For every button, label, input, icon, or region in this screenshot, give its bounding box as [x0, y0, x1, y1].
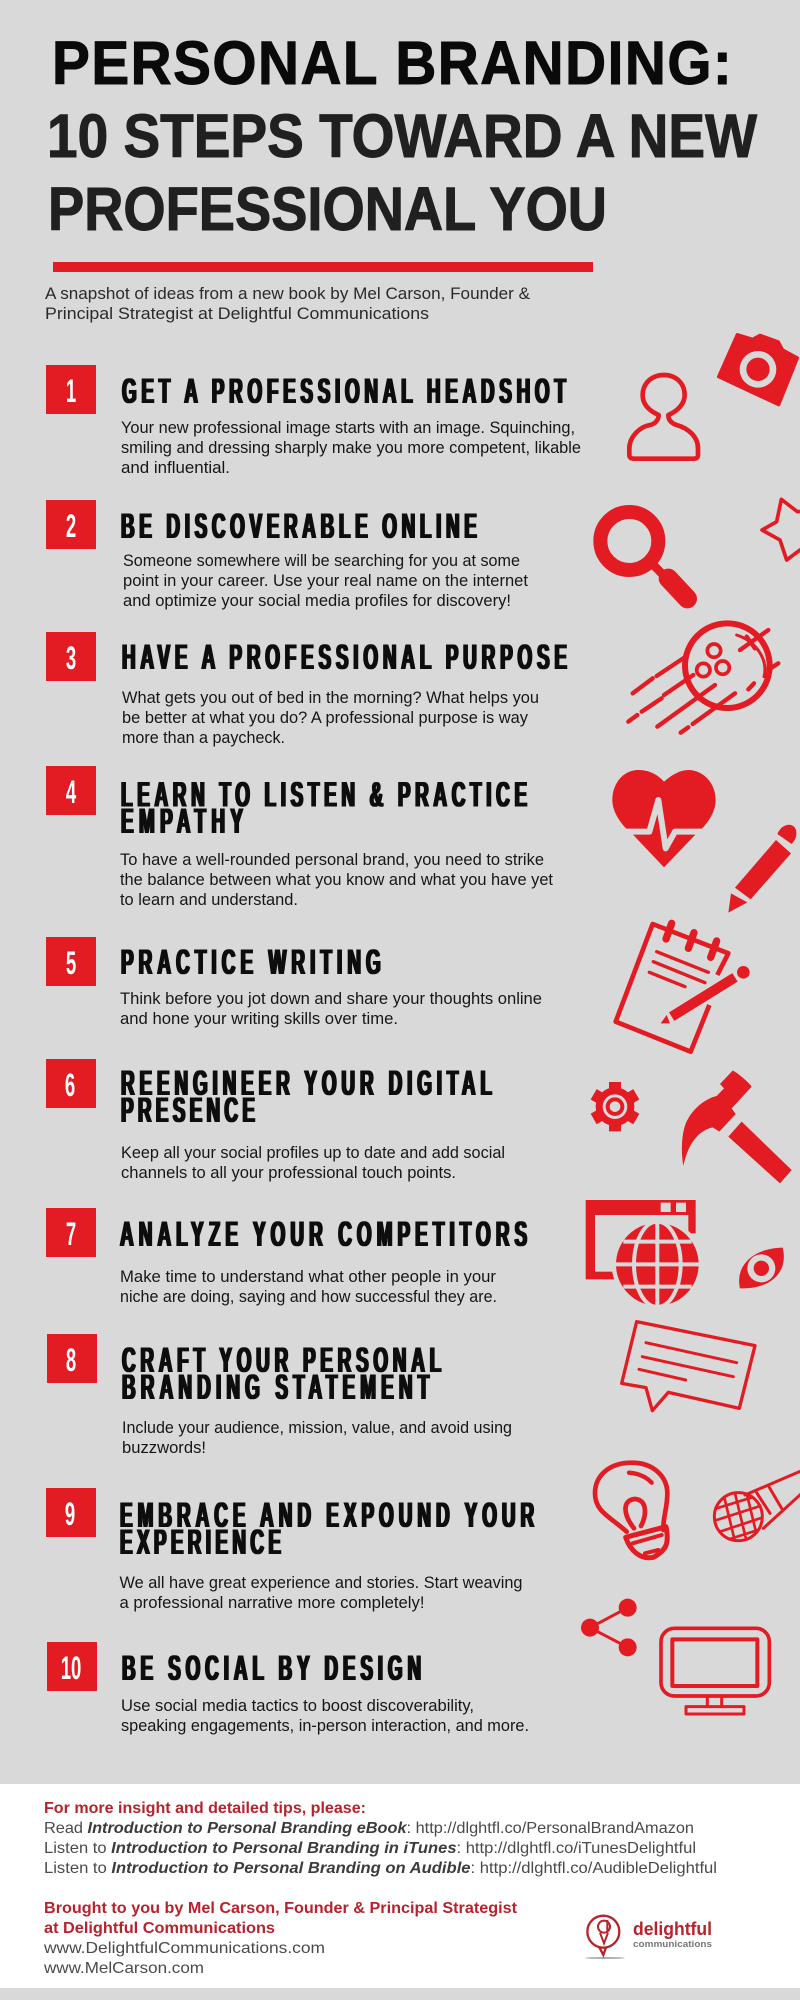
icon: heart with pulse [612, 770, 716, 867]
body 4: To have a well-rounded personal brand, you need to strike [120, 851, 544, 869]
body 8: Include your audience, mission, value, and avoid using [122, 1419, 512, 1437]
number box 1 [46, 365, 96, 414]
icon: meteor [628, 623, 778, 733]
body 7 [120, 1268, 497, 1306]
icon: monitor [661, 1628, 769, 1714]
icon: person outline [629, 375, 698, 459]
icon: notepad with pencil [616, 923, 750, 1052]
body 1: and influential. [121, 459, 230, 477]
heading 8 [122, 1341, 441, 1406]
icon: hammer [682, 1071, 792, 1183]
delightful communications logo: delightful [633, 1919, 712, 1939]
body 4 [120, 851, 553, 909]
footer resources: For more insight and detailed tips, please: [44, 1800, 366, 1817]
body 1: smiling and dressing sharply make you more competent, likable [121, 439, 581, 457]
footer credits: www.MelCarson.com [43, 1960, 204, 1977]
footer resources: Listen to Introduction to Personal Branding in iTunes : http://dlghtfl.co/iTunesDelightful [44, 1840, 696, 1857]
step 8 [47, 1334, 512, 1457]
icon: share nodes [581, 1599, 637, 1656]
body 1 [121, 419, 581, 477]
number box 3: 3 [66, 640, 76, 676]
number box 8: 8 [66, 1342, 76, 1378]
icon: camera [719, 335, 797, 405]
subtitle: A snapshot of ideas from a new book by Mel Carson, Founder & [45, 285, 530, 303]
footer resources: Listen to Introduction to Personal Branding on Audible : http://dlghtfl.co/AudibleDelightful [44, 1860, 717, 1877]
step 9 [46, 1488, 534, 1612]
heading 9: EXPERIENCE [120, 1523, 281, 1561]
body 7: Make time to understand what other people in your [120, 1268, 497, 1286]
heading 6: REENGINEER YOUR DIGITAL [121, 1064, 492, 1102]
heading 2: BE DISCOVERABLE ONLINE [121, 507, 477, 545]
body 10: speaking engagements, in-person interaction, and more. [121, 1717, 529, 1735]
footer credits: at Delightful Communications [44, 1920, 275, 1937]
red title rule [53, 262, 593, 272]
number box 1: 1 [66, 373, 76, 409]
footer resources [44, 1800, 717, 1877]
delightful communications logo: communications [633, 1939, 712, 1949]
subtitle [45, 285, 530, 323]
body 9: a professional narrative more completely! [120, 1594, 424, 1612]
body 9: We all have great experience and stories. Start weaving [120, 1574, 522, 1592]
body 3 [122, 689, 539, 747]
number box 8 [47, 1334, 97, 1383]
number box 9: 9 [65, 1496, 75, 1532]
heading 4 [121, 775, 527, 840]
number box 3 [46, 632, 96, 681]
heading 4: LEARN TO LISTEN & PRACTICE [121, 775, 527, 814]
icon: browser window with globe [586, 1200, 703, 1310]
body 8 [122, 1419, 512, 1457]
body 2: point in your career. Use your real name on the internet [123, 572, 528, 590]
heading 7: ANALYZE YOUR COMPETITORS [120, 1215, 527, 1253]
body 6 [121, 1144, 505, 1182]
footer resources: Read Introduction to Personal Branding eBook : http://dlghtfl.co/PersonalBrandAmazon [44, 1820, 694, 1837]
body 10 [121, 1697, 529, 1735]
heading 6 [121, 1064, 492, 1129]
title: PROFESSIONAL YOU [48, 175, 607, 243]
body 2: and optimize your social media profiles for discovery! [123, 592, 511, 610]
heading 1: GET A PROFESSIONAL HEADSHOT [122, 372, 566, 410]
step 7 [46, 1208, 527, 1306]
body 1: Your new professional image starts with an image. Squinching, [121, 419, 575, 437]
icon: speech bubble [622, 1322, 755, 1411]
icon: eye [739, 1248, 784, 1288]
number box 7: 7 [66, 1216, 76, 1252]
number box 2 [46, 500, 96, 549]
step 2 [46, 500, 528, 610]
footer credits: www.DelightfulCommunications.com [43, 1940, 325, 1957]
number box 9 [46, 1488, 96, 1537]
heading 3: HAVE A PROFESSIONAL PURPOSE [122, 638, 567, 676]
heading 5: PRACTICE WRITING [121, 943, 381, 981]
heading 9 [120, 1496, 534, 1561]
body 3: What gets you out of bed in the morning? What helps you [122, 689, 539, 707]
body 2 [123, 552, 528, 610]
number box 7 [46, 1208, 96, 1257]
title [47, 30, 757, 243]
number box 10 [47, 1642, 97, 1691]
icon: magnifier [600, 512, 687, 599]
number box 4 [46, 766, 96, 815]
heading 8: BRANDING STATEMENT [122, 1368, 429, 1406]
heading 10: BE SOCIAL BY DESIGN [122, 1649, 421, 1687]
number box 2: 2 [66, 508, 76, 544]
body 10: Use social media tactics to boost discoverability, [121, 1697, 474, 1715]
subtitle: Principal Strategist at Delightful Communications [45, 305, 429, 323]
body 4: the balance between what you know and what you have yet [120, 871, 553, 889]
body 7: niche are doing, saying and how successful they are. [120, 1288, 497, 1306]
number box 4: 4 [66, 774, 76, 810]
number box 6: 6 [65, 1067, 75, 1103]
heading 6: PRESENCE [121, 1091, 255, 1129]
number box 10: 10 [61, 1650, 81, 1686]
heading 4: EMPATHY [121, 802, 243, 840]
body 6: channels to all your professional touch points. [121, 1164, 456, 1182]
body 3: be better at what you do? A professional purpose is way [122, 709, 529, 727]
number box 6 [46, 1059, 96, 1108]
body 4: to learn and understand. [120, 891, 298, 909]
icon: pencil [728, 825, 796, 913]
body 2: Someone somewhere will be searching for you at some [123, 552, 520, 570]
body 5 [120, 990, 542, 1028]
number box 5: 5 [66, 945, 76, 981]
body 5: Think before you jot down and share your thoughts online [120, 990, 542, 1008]
step 5 [46, 937, 542, 1028]
icon: star outline [762, 499, 800, 560]
step 3 [46, 632, 567, 747]
step 4 [46, 766, 553, 909]
icon: microphone [714, 1471, 800, 1542]
body 6: Keep all your social profiles up to date and add social [121, 1144, 505, 1162]
step 1 [46, 365, 581, 477]
icon: light bulb [595, 1463, 667, 1558]
icon: gear [594, 1082, 636, 1131]
heading 9: EMBRACE AND EXPOUND YOUR [120, 1496, 534, 1534]
footer panel [0, 1784, 800, 1988]
step 10 [47, 1642, 529, 1735]
delightful communications logo [585, 1916, 712, 1959]
body 8: buzzwords! [122, 1439, 206, 1457]
number box 5 [46, 937, 96, 986]
heading 8: CRAFT YOUR PERSONAL [122, 1341, 441, 1379]
body 5: and hone your writing skills over time. [120, 1010, 398, 1028]
title: PERSONAL BRANDING: [52, 30, 732, 97]
step 6 [46, 1059, 505, 1182]
footer credits [43, 1900, 518, 1977]
footer credits: Brought to you by Mel Carson, Founder & Principal Strategist [44, 1900, 518, 1917]
body 3: more than a paycheck. [122, 729, 285, 747]
body 9 [120, 1574, 522, 1612]
